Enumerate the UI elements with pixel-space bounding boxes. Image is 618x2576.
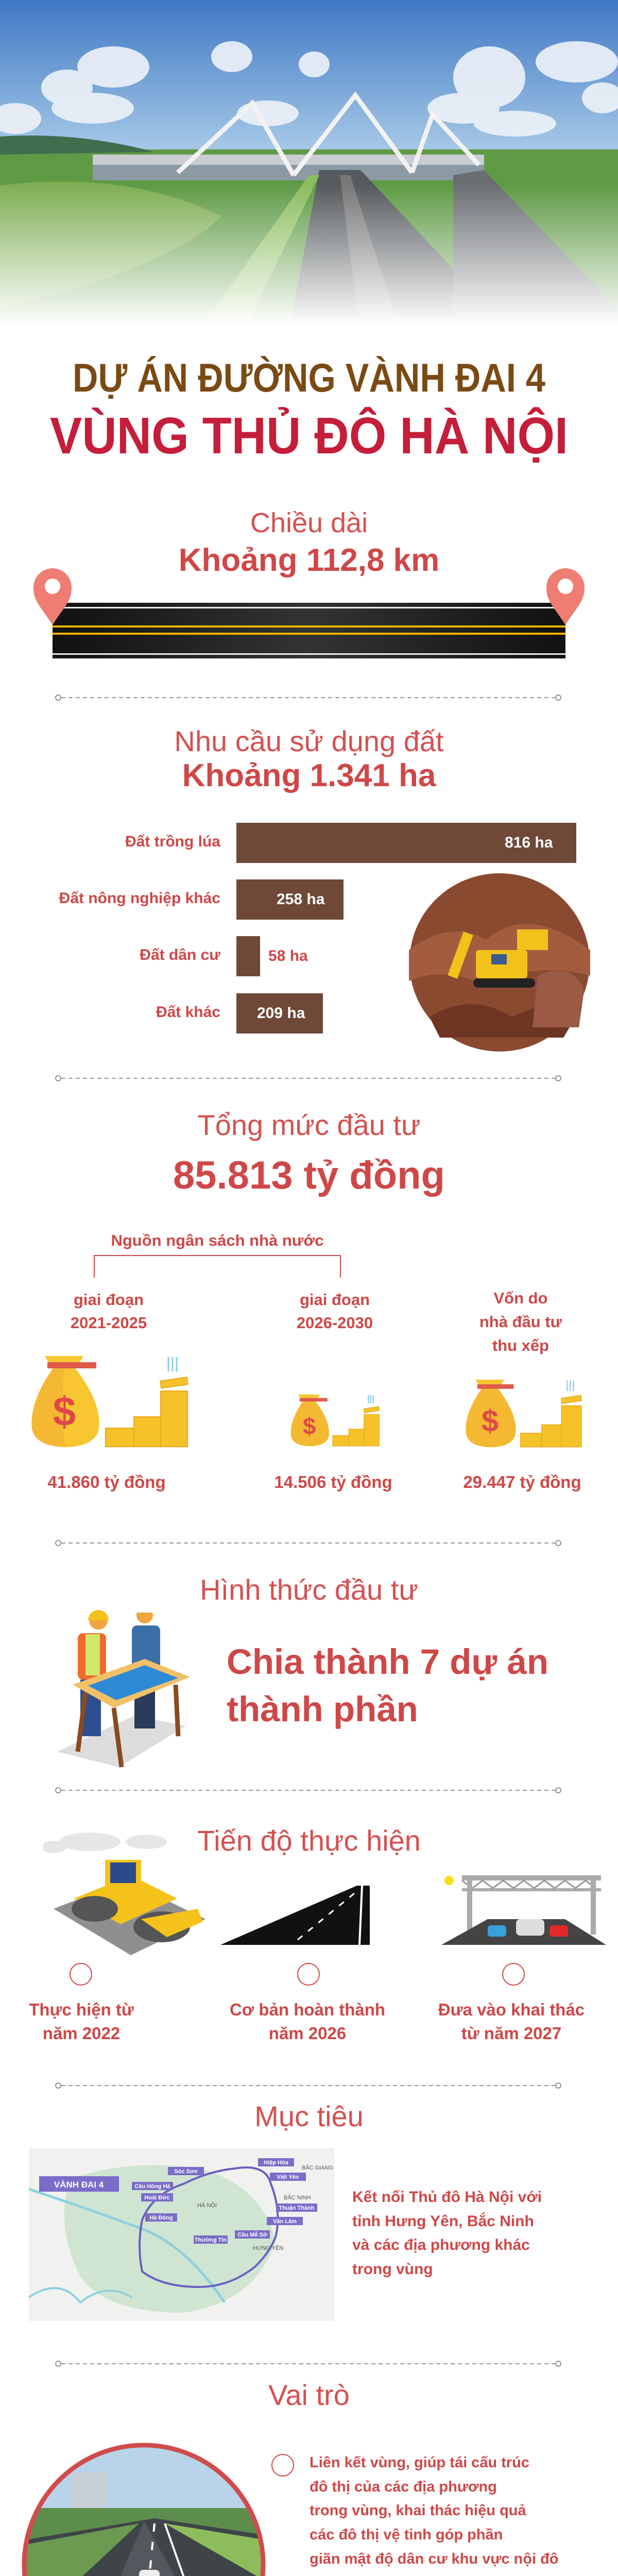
milestone: start 2022: năm 2022 xyxy=(43,2024,120,2043)
map: ring road 4: Việt Yên xyxy=(277,2174,299,2180)
milestone: operation 2027 xyxy=(438,1963,585,2043)
label: phase 2021-2025 xyxy=(71,1291,147,1332)
text: objective: Kết nối Thủ đô Hà Nội với xyxy=(352,2189,542,2206)
label: phase 2021-2025: giai đoạn xyxy=(74,1291,144,1309)
value: land use: Khoảng 1.341 ha xyxy=(182,758,436,793)
icon: money bag small: $ xyxy=(303,1413,316,1439)
title: VÙNG THỦ ĐÔ HÀ NỘI xyxy=(50,407,568,465)
amount: 29.447: 29.447 tỷ đồng xyxy=(463,1472,581,1492)
heading: total investment: Tổng mức đầu tư xyxy=(198,1109,420,1141)
label: phase 2021-2025: 2021-2025 xyxy=(71,1314,147,1332)
heading: schedule: Tiến độ thực hiện xyxy=(197,1824,421,1857)
heading: role: Vai trò xyxy=(268,2379,350,2411)
map: ring road 4: HƯNG YÊN xyxy=(253,2245,283,2251)
bar: residential: 58 ha xyxy=(268,947,308,964)
icon: money bag large xyxy=(32,1356,188,1447)
label: investor capital: Vốn do xyxy=(493,1289,548,1307)
icon: toll gate xyxy=(441,1875,606,1945)
amount: 41.860: 41.860 tỷ đồng xyxy=(47,1472,166,1492)
bar: other: Đất khác xyxy=(156,1004,220,1021)
heading: length: Chiều dài xyxy=(250,507,368,538)
icon: road roller xyxy=(43,1833,205,1955)
text: objective xyxy=(352,2189,542,2277)
map: ring road 4: HÀ NỘI xyxy=(197,2202,217,2209)
milestone: operation 2027: từ năm 2027 xyxy=(461,2024,561,2043)
bar: other agricultural xyxy=(59,879,344,920)
icon: money bag small xyxy=(290,1394,380,1447)
bracket: state budget xyxy=(94,1231,341,1278)
map: ring road 4: Thuận Thành xyxy=(279,2205,315,2211)
bar: other agricultural: Đất nông nghiệp khác xyxy=(59,890,220,907)
heading: land use: Nhu cầu sử dụng đất xyxy=(174,725,444,757)
icon: finished road xyxy=(220,1886,370,1945)
map: ring road 4: Hà Đông xyxy=(149,2215,173,2221)
amount: 14.506: 14.506 tỷ đồng xyxy=(274,1472,392,1492)
text: seven component projects xyxy=(227,1642,548,1729)
role item 1: Liên kết vùng, giúp tái cấu trúc xyxy=(310,2454,529,2471)
bar: rice land xyxy=(125,823,576,863)
map: ring road 4: Thường Tín xyxy=(195,2237,227,2243)
icon: money bag medium xyxy=(466,1380,582,1448)
value: length: Khoảng 112,8 km xyxy=(179,543,439,578)
icon: money bag large: $ xyxy=(53,1388,76,1434)
milestone: complete 2026: Cơ bản hoàn thành xyxy=(230,2000,385,2019)
text: seven component projects: thành phần xyxy=(227,1689,418,1729)
map: ring road 4: Văn Lâm xyxy=(273,2218,297,2225)
bar: other: 209 ha xyxy=(257,1005,305,1022)
milestone: complete 2026: năm 2026 xyxy=(269,2024,346,2043)
bar: other xyxy=(156,993,323,1033)
label: investor capital: thu xếp xyxy=(492,1336,549,1354)
bar: rice land: Đất trồng lúa xyxy=(125,833,220,850)
map: ring road 4: BẮC NINH xyxy=(284,2194,311,2201)
role item 1: giãn mật độ dân cư khu vực nội đô xyxy=(310,2551,558,2567)
title xyxy=(50,355,568,465)
icon: engineers at table xyxy=(58,1610,190,1768)
map: ring road 4: Cầu Hồng Hà xyxy=(134,2183,170,2190)
milestone: complete 2026 xyxy=(230,1963,385,2043)
milestone: start 2022 xyxy=(29,1963,134,2043)
bar: residential: Đất dân cư xyxy=(140,946,220,963)
text: objective: tỉnh Hưng Yên, Bắc Ninh xyxy=(352,2212,534,2230)
map: ring road 4: VÀNH ĐAI 4 xyxy=(54,2180,104,2190)
bar chart: land use xyxy=(59,823,576,1033)
road graphic with pins xyxy=(33,568,585,658)
role item 1 xyxy=(271,2454,558,2567)
milestone: start 2022: Thực hiện từ xyxy=(29,2000,134,2019)
title: DỰ ÁN ĐƯỜNG VÀNH ĐAI 4 xyxy=(73,355,545,400)
map: ring road 4: Sóc Sơn xyxy=(174,2168,198,2175)
milestone: operation 2027: Đưa vào khai thác xyxy=(438,2000,585,2019)
role item 1: đô thị của các địa phương xyxy=(310,2479,497,2495)
bar: residential xyxy=(140,936,308,976)
map: ring road 4: Hiệp Hòa xyxy=(264,2160,289,2166)
bar: other agricultural: 258 ha xyxy=(277,891,324,908)
hero image: ring road bridge xyxy=(0,0,618,318)
text: objective: và các địa phương khác xyxy=(352,2236,530,2253)
map: ring road 4 xyxy=(29,2148,335,2321)
bar: rice land: 816 ha xyxy=(505,834,553,851)
label: investor capital xyxy=(479,1289,562,1354)
label: investor capital: nhà đầu tư xyxy=(479,1313,562,1331)
label: phase 2026-2030: giai đoạn xyxy=(300,1291,370,1309)
icon: excavator on earth circle xyxy=(409,873,590,1052)
bracket: state budget: Nguồn ngân sách nhà nước xyxy=(111,1231,324,1249)
label: phase 2026-2030: 2026-2030 xyxy=(297,1314,373,1332)
text: seven component projects: Chia thành 7 dự án xyxy=(227,1642,548,1682)
map: ring road 4: Hoài Đức xyxy=(145,2195,169,2201)
role item 1: các đô thị vệ tinh góp phần xyxy=(310,2527,503,2543)
illustration: road photo in circle xyxy=(22,2443,266,2576)
icon: money bag medium: $ xyxy=(482,1403,499,1438)
map: ring road 4: BẮC GIANG xyxy=(302,2164,333,2171)
heading: objective: Mục tiêu xyxy=(254,2100,364,2132)
text: objective: trong vùng xyxy=(352,2261,433,2277)
label: phase 2026-2030 xyxy=(297,1291,373,1332)
heading: investment form: Hình thức đầu tư xyxy=(200,1573,418,1606)
map: ring road 4: Cầu Mễ Sở xyxy=(237,2231,267,2238)
value: total investment: 85.813 tỷ đồng xyxy=(173,1154,445,1197)
role item 1: trong vùng, khai thác hiệu quả xyxy=(310,2502,526,2519)
